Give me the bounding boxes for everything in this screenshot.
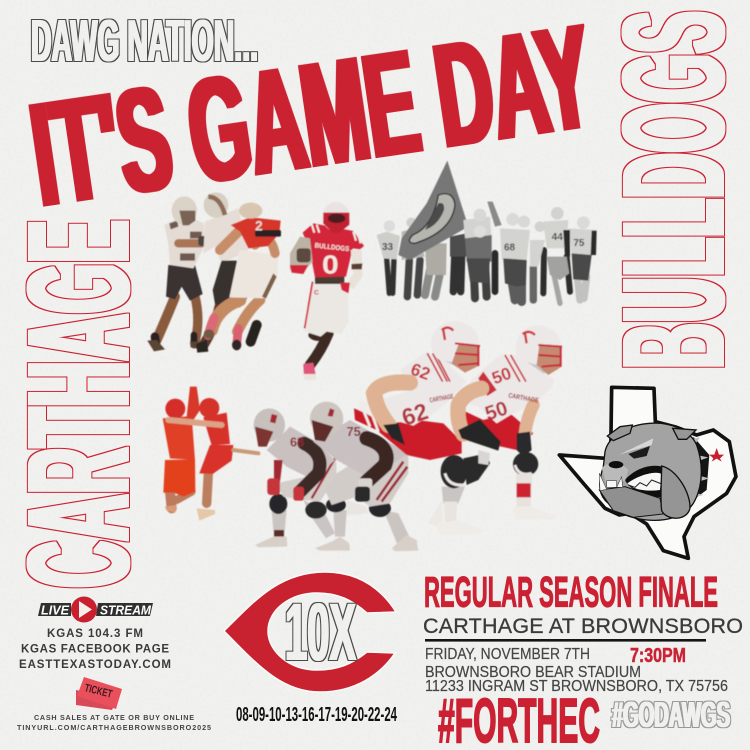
ticket sales info: TINYURL.COM/CARTHAGEBROWNSBORO2025 bbox=[17, 723, 211, 732]
game details: BROWNSBORO BEAR STADIUM bbox=[425, 664, 641, 681]
lineman 50 bbox=[455, 325, 562, 519]
photo: team running with flag: 33 bbox=[382, 242, 394, 253]
championship years: 08-09-10-13-16-17-19-20-22-24 bbox=[236, 704, 397, 726]
runner number zero: 0 bbox=[322, 249, 339, 279]
photo: team running with flag: 68 bbox=[504, 243, 516, 254]
live stream badge: STREAM bbox=[100, 602, 152, 618]
ticket sales info bbox=[17, 713, 211, 732]
Texas outline bbox=[559, 387, 736, 558]
logo: red C with 10X: 10X bbox=[285, 587, 356, 678]
lineman 62: 62 bbox=[408, 359, 433, 384]
broadcast info bbox=[19, 628, 171, 671]
photo: tackling players bbox=[147, 192, 364, 380]
lineman 75 bbox=[310, 402, 418, 551]
lineman 75: 75 bbox=[347, 425, 361, 439]
broadcast info: KGAS 104.3 FM bbox=[47, 628, 143, 640]
lineman 50: CARTHAGE bbox=[508, 392, 540, 405]
lineman 62: 62 bbox=[398, 398, 431, 431]
photo: team running with flag bbox=[377, 161, 597, 303]
star marker bbox=[709, 448, 724, 462]
lineman 62 bbox=[347, 321, 490, 535]
broadcast info: EASTTEXASTODAY.COM bbox=[19, 659, 171, 671]
broadcast info: KGAS FACEBOOK PAGE bbox=[21, 644, 169, 656]
logo: Texas bulldog bbox=[559, 387, 736, 558]
icon: ticket: TICKET bbox=[83, 682, 114, 701]
runner number zero bbox=[290, 202, 364, 380]
live stream badge bbox=[38, 596, 153, 622]
kickoff time: 7:30PM bbox=[630, 645, 686, 667]
photo: tackling players: 2 bbox=[255, 218, 263, 234]
photo: team running with flag: 75 bbox=[573, 238, 585, 249]
lineman 68 bbox=[254, 408, 337, 547]
lineman 50: 50 bbox=[489, 363, 514, 388]
runner number zero: BULLDOGS bbox=[314, 243, 350, 253]
photo: two red-uniform players bbox=[163, 321, 562, 551]
matchup: CARTHAGE AT BROWNSBORO bbox=[423, 614, 743, 638]
text: DAWG NATION... bbox=[31, 8, 258, 74]
logo: red C with 10X bbox=[224, 572, 396, 692]
runner number zero: C bbox=[314, 290, 319, 297]
game details: FRIDAY, NOVEMBER 7TH bbox=[425, 646, 590, 663]
game details bbox=[425, 646, 728, 695]
bulldog head bbox=[599, 423, 709, 520]
ticket sales info: CASH SALES AT GATE OR BUY ONLINE bbox=[34, 713, 194, 722]
lineman 68: 68 bbox=[290, 436, 304, 450]
game details: 11233 INGRAM ST BROWNSBORO, TX 75756 bbox=[425, 678, 728, 695]
lineman 62: CARTHAGE bbox=[429, 393, 454, 404]
icon: ticket bbox=[76, 677, 122, 710]
live stream badge: LIVE bbox=[41, 602, 69, 618]
lineman 50: 50 bbox=[483, 398, 510, 425]
photo: team running with flag: 44 bbox=[552, 232, 563, 243]
